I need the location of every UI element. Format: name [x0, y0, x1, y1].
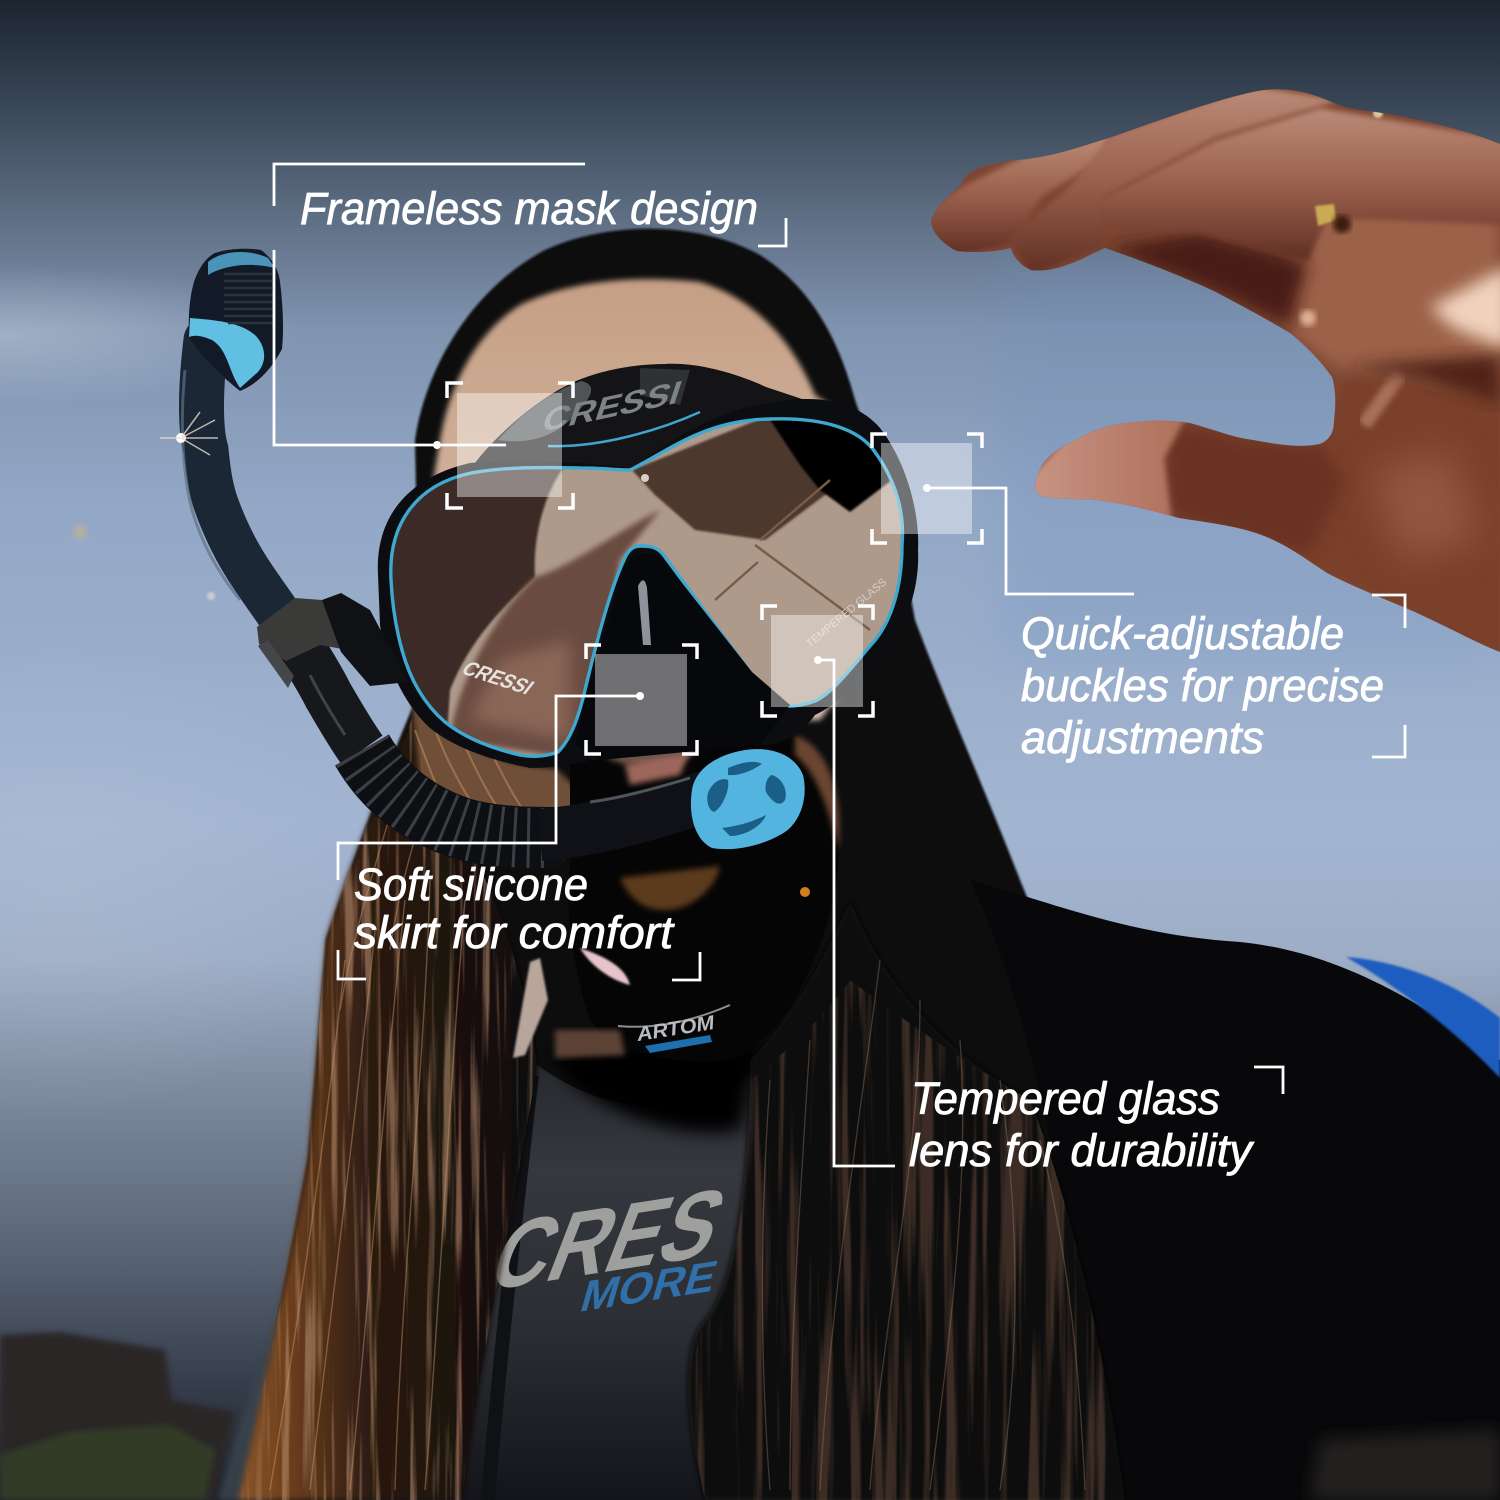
lens flare on tube [160, 412, 218, 455]
palm and knuckles [1287, 218, 1500, 376]
callout: quick-adjustable buckles: adjustments [1021, 712, 1264, 763]
hair silhouette [238, 229, 1125, 1500]
ring finger [1101, 108, 1500, 262]
chin in shadow [568, 705, 839, 1062]
callout: quick-adjustable buckles: buckles for precise [1021, 660, 1384, 711]
callout: quick-adjustable buckles: Quick-adjustable [1021, 608, 1344, 659]
snorkel corrugated hose [362, 750, 562, 838]
callout: tempered glass lens [814, 656, 1283, 1176]
far finger [925, 134, 1112, 256]
snorkel [160, 249, 805, 849]
chest sub logo text: MORE [575, 1252, 723, 1322]
cheek [795, 735, 839, 850]
callout: frameless mask design [274, 164, 786, 449]
callout: tempered glass lens: lens for durability [909, 1125, 1255, 1176]
mask lens: CRESSI [457, 657, 539, 699]
shadow under ring finger [1105, 233, 1308, 325]
wetsuit collar: ARTOM [634, 1012, 717, 1046]
snorkel mouthpiece tube [540, 795, 710, 835]
highlight square: tempered glass lens [762, 606, 873, 716]
callout: soft silicone skirt [338, 692, 700, 980]
chin highlight [580, 948, 630, 985]
thumb middle [1164, 423, 1345, 555]
right long hair [688, 900, 1125, 1500]
thumb tip [1035, 420, 1186, 516]
middle finger [1009, 86, 1340, 276]
chest panel [462, 1040, 770, 1500]
highlight square: frameless mask design [447, 383, 573, 508]
callout: tempered glass lens: Tempered glass [911, 1073, 1220, 1124]
lower palm [1253, 380, 1500, 660]
callout: frameless mask design: Frameless mask design [300, 183, 758, 234]
palm highlight [1430, 265, 1500, 350]
distant building and trees [0, 1332, 235, 1500]
mask strap: CRESSI [538, 373, 687, 439]
snorkel clip [257, 598, 348, 661]
mask lens: TEMPERED GLASS [804, 576, 889, 650]
mask lens [392, 420, 901, 754]
pale collar strip [513, 958, 548, 1058]
snorkel top block [189, 249, 283, 391]
wetsuit collar [618, 1005, 730, 1053]
beard under mouthpiece [620, 866, 720, 910]
mask strap [470, 364, 805, 470]
left beard [412, 700, 590, 860]
forehead and face [412, 279, 880, 1062]
cyan lens rim [391, 419, 903, 756]
hand [920, 70, 1500, 670]
mask frame [378, 399, 920, 770]
callout: quick-adjustable buckles [923, 484, 1405, 763]
cyan purge valve [691, 749, 805, 849]
chest logo text: CRES [476, 1167, 740, 1313]
gold ring [1315, 204, 1336, 226]
black wetsuit shoulder [218, 880, 1500, 1500]
snorkel lower tube [290, 631, 362, 750]
highlight square: soft silicone skirt [586, 645, 697, 754]
left long hair [238, 700, 537, 1500]
highlight square: quick-adjustable buckles [872, 434, 982, 543]
callout: soft silicone skirt: skirt for comfort [354, 907, 676, 958]
callout: soft silicone skirt: Soft silicone [354, 859, 588, 910]
nose pocket [575, 553, 790, 760]
moustache and lip [590, 732, 700, 768]
